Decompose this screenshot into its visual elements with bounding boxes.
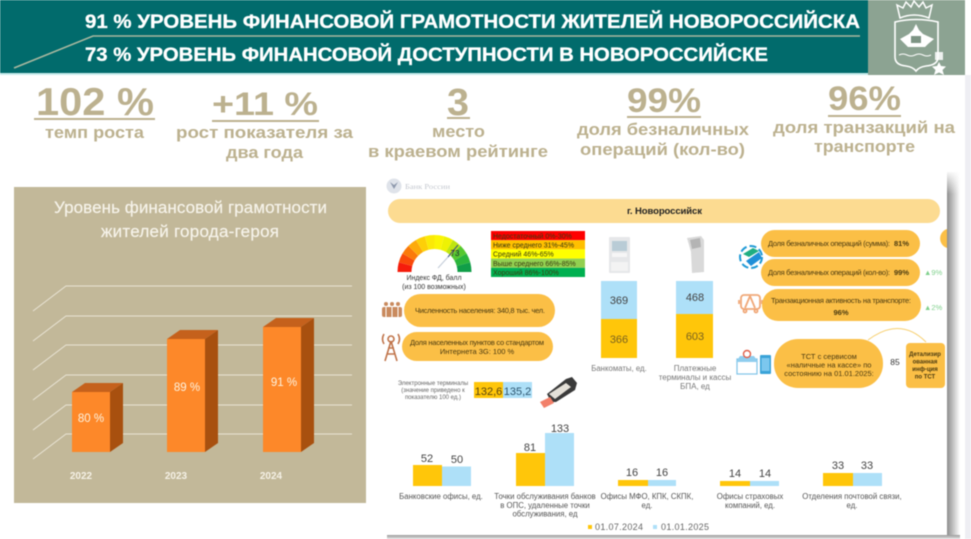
bar pair: MFO offices bbox=[601, 467, 693, 510]
electronic terminals label bbox=[398, 381, 468, 401]
stat: 3 место в краевом рейтинге: в краевом рейтинге bbox=[368, 143, 548, 161]
growth indicator 9%: ▲9% bbox=[924, 268, 943, 277]
stacked bar: ATMs: Банкоматы, ед. bbox=[591, 364, 647, 373]
pill: transport transactions bbox=[762, 289, 921, 321]
stat: 96% доля транзакций на транспорте: транспорте bbox=[814, 138, 915, 156]
city title pill: г. Новороссийск bbox=[627, 206, 702, 217]
bar pair: service points: 133 bbox=[551, 423, 569, 435]
Bank of Russia logo bbox=[386, 178, 450, 194]
pill: transport transactions: Транзакционная активность на транспорте: bbox=[771, 296, 911, 305]
stat: 99% доля безналичных операций: 99% bbox=[627, 82, 701, 120]
legend: dates: 01.01.2025 bbox=[661, 522, 709, 532]
stat: 3 место в краевом рейтинге bbox=[368, 82, 548, 161]
bar pair: bank offices: Банковские офисы, ед. bbox=[399, 492, 483, 501]
gauge legend: Недостаточный 0%-30% bbox=[493, 232, 572, 240]
stat: 99% доля безналичных операций bbox=[577, 82, 750, 159]
bar 2023 bbox=[167, 330, 218, 452]
gauge: financial accessibility index 73: (из 100 возможных) bbox=[402, 284, 466, 291]
stat: +11 % рост показателя: рост показателя за bbox=[176, 124, 354, 142]
year axis labels: 2024 bbox=[260, 471, 283, 482]
value 85: 85 bbox=[890, 357, 900, 367]
year axis labels bbox=[70, 471, 283, 482]
stacked bar: payment terminals: 468 bbox=[686, 292, 704, 304]
chart heading: Уровень финансовой грамотности bbox=[54, 198, 327, 217]
bar pair: bank offices bbox=[399, 453, 483, 501]
bar pair: service points: обслуживания, ед bbox=[512, 510, 578, 518]
bar pair: bank offices: 52 bbox=[421, 453, 433, 465]
bar pair: post offices: ед. bbox=[847, 501, 857, 510]
pill: cash at checkout service: ТСТ с сервисом bbox=[801, 352, 857, 361]
gauge legend: Средний 46%-65% bbox=[493, 251, 554, 259]
electronic terminals label: Электронные терминалы bbox=[398, 381, 468, 387]
bar pair: insurance offices: 14 bbox=[729, 468, 741, 480]
bar 2022 bbox=[72, 383, 123, 452]
year axis labels: 2023 bbox=[165, 471, 188, 482]
pill: cash at checkout service bbox=[774, 339, 883, 388]
heading line 2: 73 % УРОВЕНЬ ФИНАНСОВОЙ ДОСТУПНОСТИ В НОВОРОССИЙСКЕ bbox=[85, 42, 768, 66]
bar pair: insurance offices: Офисы страховых bbox=[717, 492, 783, 501]
partial pill at panel edge bbox=[940, 229, 947, 248]
bar pair: MFO offices: 16 bbox=[626, 467, 638, 479]
gauge legend: Хороший 86%-100% bbox=[493, 269, 559, 277]
header band bbox=[0, 0, 868, 75]
gauge: financial accessibility index 73 bbox=[402, 242, 466, 291]
stat: 96% доля транзакций на транспорте: доля транзакций на bbox=[773, 119, 956, 137]
pill: cash at checkout service: состоянию на 01.01.2025: bbox=[784, 369, 874, 378]
growth indicator 2%: ▲2% bbox=[924, 303, 943, 312]
gauge legend bbox=[491, 231, 585, 277]
internet 3G pill bbox=[402, 332, 553, 361]
bar pair: MFO offices: Офисы МФО, КПК, СКПК, bbox=[601, 492, 693, 501]
icon: shop and phone bbox=[736, 350, 771, 374]
stat: 102 % темп роста: темп роста bbox=[45, 124, 145, 142]
icon: bus bbox=[739, 295, 762, 312]
heading line 1: 91 % УРОВЕНЬ ФИНАНСОВОЙ ГРАМОТНОСТИ ЖИТЕЛЕЙ НОВОРОССИЙСКА bbox=[85, 9, 860, 33]
icon: ATM bbox=[609, 237, 630, 273]
gauge: financial accessibility index 73: 73 bbox=[451, 249, 460, 258]
icon: antenna tower bbox=[382, 334, 400, 361]
bar 2022: 80 % bbox=[78, 413, 104, 425]
bar pair: post offices: 33 bbox=[861, 460, 873, 472]
chart heading: жителей города-героя bbox=[101, 222, 279, 241]
chart heading bbox=[54, 198, 327, 241]
bar pair: post offices: Отделения почтовой связи, bbox=[802, 492, 902, 501]
bar pair: MFO offices: 16 bbox=[656, 467, 668, 479]
stat: 102 % темп роста: 102 % bbox=[36, 81, 154, 124]
stat: 3 место в краевом рейтинге: 3 bbox=[447, 82, 469, 124]
bar pair: service points: Точки обслуживания банков bbox=[494, 492, 596, 501]
pill: transport transactions: 96% bbox=[833, 308, 849, 317]
bar pair: service points bbox=[494, 423, 596, 518]
bar 2024: 91 % bbox=[271, 377, 297, 389]
detail box: инф-ция bbox=[912, 366, 938, 373]
population pill: Численность населения: 340,8 тыс. чел. bbox=[415, 306, 545, 315]
pill: cashless share by sum: 81% bbox=[894, 239, 909, 248]
pill: cashless share by sum: Доля безналичных операций (сумма): bbox=[768, 239, 890, 248]
internet 3G pill: Доля населенных пунктов со стандартом bbox=[410, 338, 544, 347]
stat: +11 % рост показателя: два года bbox=[226, 144, 304, 162]
bar pair: bank offices: 50 bbox=[451, 454, 463, 466]
stat: +11 % рост показателя bbox=[176, 86, 354, 162]
icon: city coat of arms bbox=[868, 0, 965, 75]
electronic terminals label: показателю 100 ед.) bbox=[405, 395, 461, 401]
stacked bar: payment terminals bbox=[659, 281, 732, 391]
arrow: curve to detail box bbox=[868, 328, 926, 342]
stacked bar: payment terminals: Платежные bbox=[674, 364, 717, 373]
icon: payment kiosk bbox=[687, 236, 704, 273]
bar pair: insurance offices: 14 bbox=[759, 468, 771, 480]
internet 3G pill: Интернета 3G: 100 % bbox=[440, 347, 514, 356]
stacked bar: payment terminals: терминалы и кассы bbox=[659, 373, 732, 382]
gauge legend: Выше среднего 66%-85% bbox=[493, 261, 576, 268]
bar pair: post offices: 33 bbox=[832, 460, 844, 472]
legend: dates: 01.07.2024 bbox=[595, 522, 643, 532]
stat: 3 место в краевом рейтинге: место bbox=[432, 123, 485, 141]
panel: Novorossiysk dashboard bbox=[382, 75, 971, 539]
bar 2024 bbox=[263, 318, 314, 452]
stat: +11 % рост показателя: +11 % bbox=[212, 86, 318, 122]
stacked bar: ATMs: 369 bbox=[610, 295, 628, 307]
detail box bbox=[906, 343, 945, 388]
stat: 102 % темп роста bbox=[34, 81, 155, 142]
bar pair: post offices bbox=[802, 460, 902, 510]
stacked bar: ATMs bbox=[591, 281, 647, 373]
bar pair: service points: в ОПС, удаленные точки bbox=[500, 501, 590, 510]
pill: cashless share by sum bbox=[761, 230, 920, 257]
bar pair: service points: 81 bbox=[524, 442, 536, 454]
icon: payment cards bbox=[740, 246, 762, 268]
detail box: Детализир bbox=[909, 352, 941, 358]
icon: people bbox=[382, 302, 402, 317]
electronic terminals label: (значение приведено к bbox=[401, 388, 465, 394]
stat: 96% доля транзакций на транспорте: 96% bbox=[828, 80, 901, 118]
Bank of Russia logo: Банк России bbox=[405, 182, 450, 191]
bar pair: MFO offices: ед. bbox=[642, 501, 652, 510]
stacked bar: payment terminals: БПА, ед bbox=[680, 382, 710, 391]
electronic terminals values bbox=[474, 382, 532, 398]
detail box: по ТСТ bbox=[915, 374, 936, 380]
pill: cash at checkout service: «наличные на кассе» по bbox=[787, 360, 871, 370]
stat: 99% доля безналичных операций: доля безналичных bbox=[577, 121, 750, 139]
year axis labels: 2022 bbox=[70, 471, 93, 482]
stat: 99% доля безналичных операций: операций (кол-во) bbox=[580, 141, 745, 159]
city title pill bbox=[388, 199, 940, 223]
electronic terminals values: 132,6 bbox=[475, 386, 502, 398]
panel: financial literacy chart bbox=[14, 187, 366, 503]
bar pair: insurance offices: компаний, ед. bbox=[725, 501, 775, 510]
pill: cashless share by count: 99% bbox=[894, 268, 909, 277]
bar pair: insurance offices bbox=[717, 468, 783, 510]
electronic terminals values: 135,2 bbox=[504, 386, 531, 398]
gauge legend: Ниже среднего 31%-45% bbox=[493, 242, 574, 250]
stat: 96% доля транзакций на транспорте bbox=[773, 80, 956, 156]
bar 2023: 89 % bbox=[174, 382, 200, 394]
population pill bbox=[404, 294, 555, 327]
detail box: ованная bbox=[913, 360, 938, 366]
pill: cashless share by count: Доля безналичных операций (кол-во): bbox=[768, 268, 890, 277]
stacked bar: ATMs: 366 bbox=[610, 334, 628, 346]
legend: dates bbox=[588, 522, 709, 532]
gauge: financial accessibility index 73: Индекс ФД, балл bbox=[406, 274, 462, 282]
pill: cashless share by count bbox=[761, 259, 920, 286]
stacked bar: payment terminals: 603 bbox=[686, 331, 704, 343]
icon: POS terminal bbox=[540, 377, 577, 408]
